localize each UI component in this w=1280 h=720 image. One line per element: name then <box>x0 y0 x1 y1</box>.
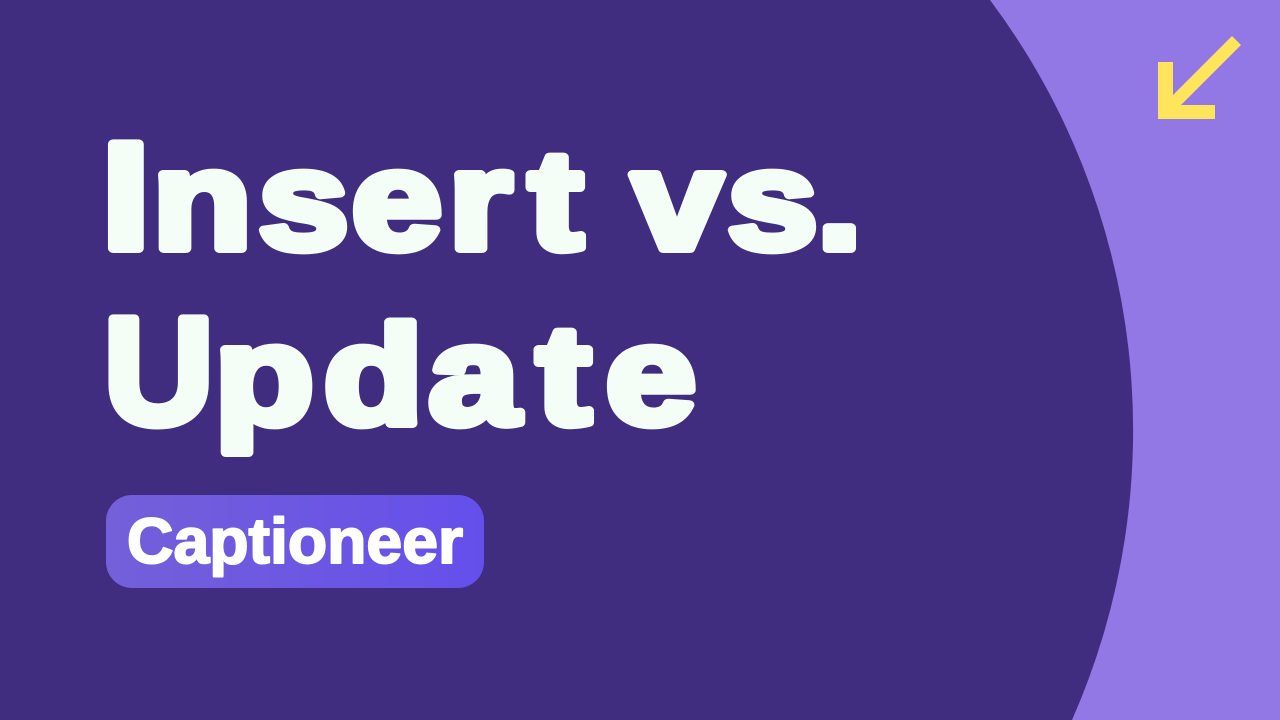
title line 1: Insert vs. <box>101 111 862 281</box>
badge label: Captioneer <box>127 505 463 577</box>
icon: yellow arrow pointing down-left <box>1158 36 1241 119</box>
brand badge <box>106 495 484 588</box>
badge background <box>106 495 484 588</box>
title line 2: Update <box>104 286 696 456</box>
